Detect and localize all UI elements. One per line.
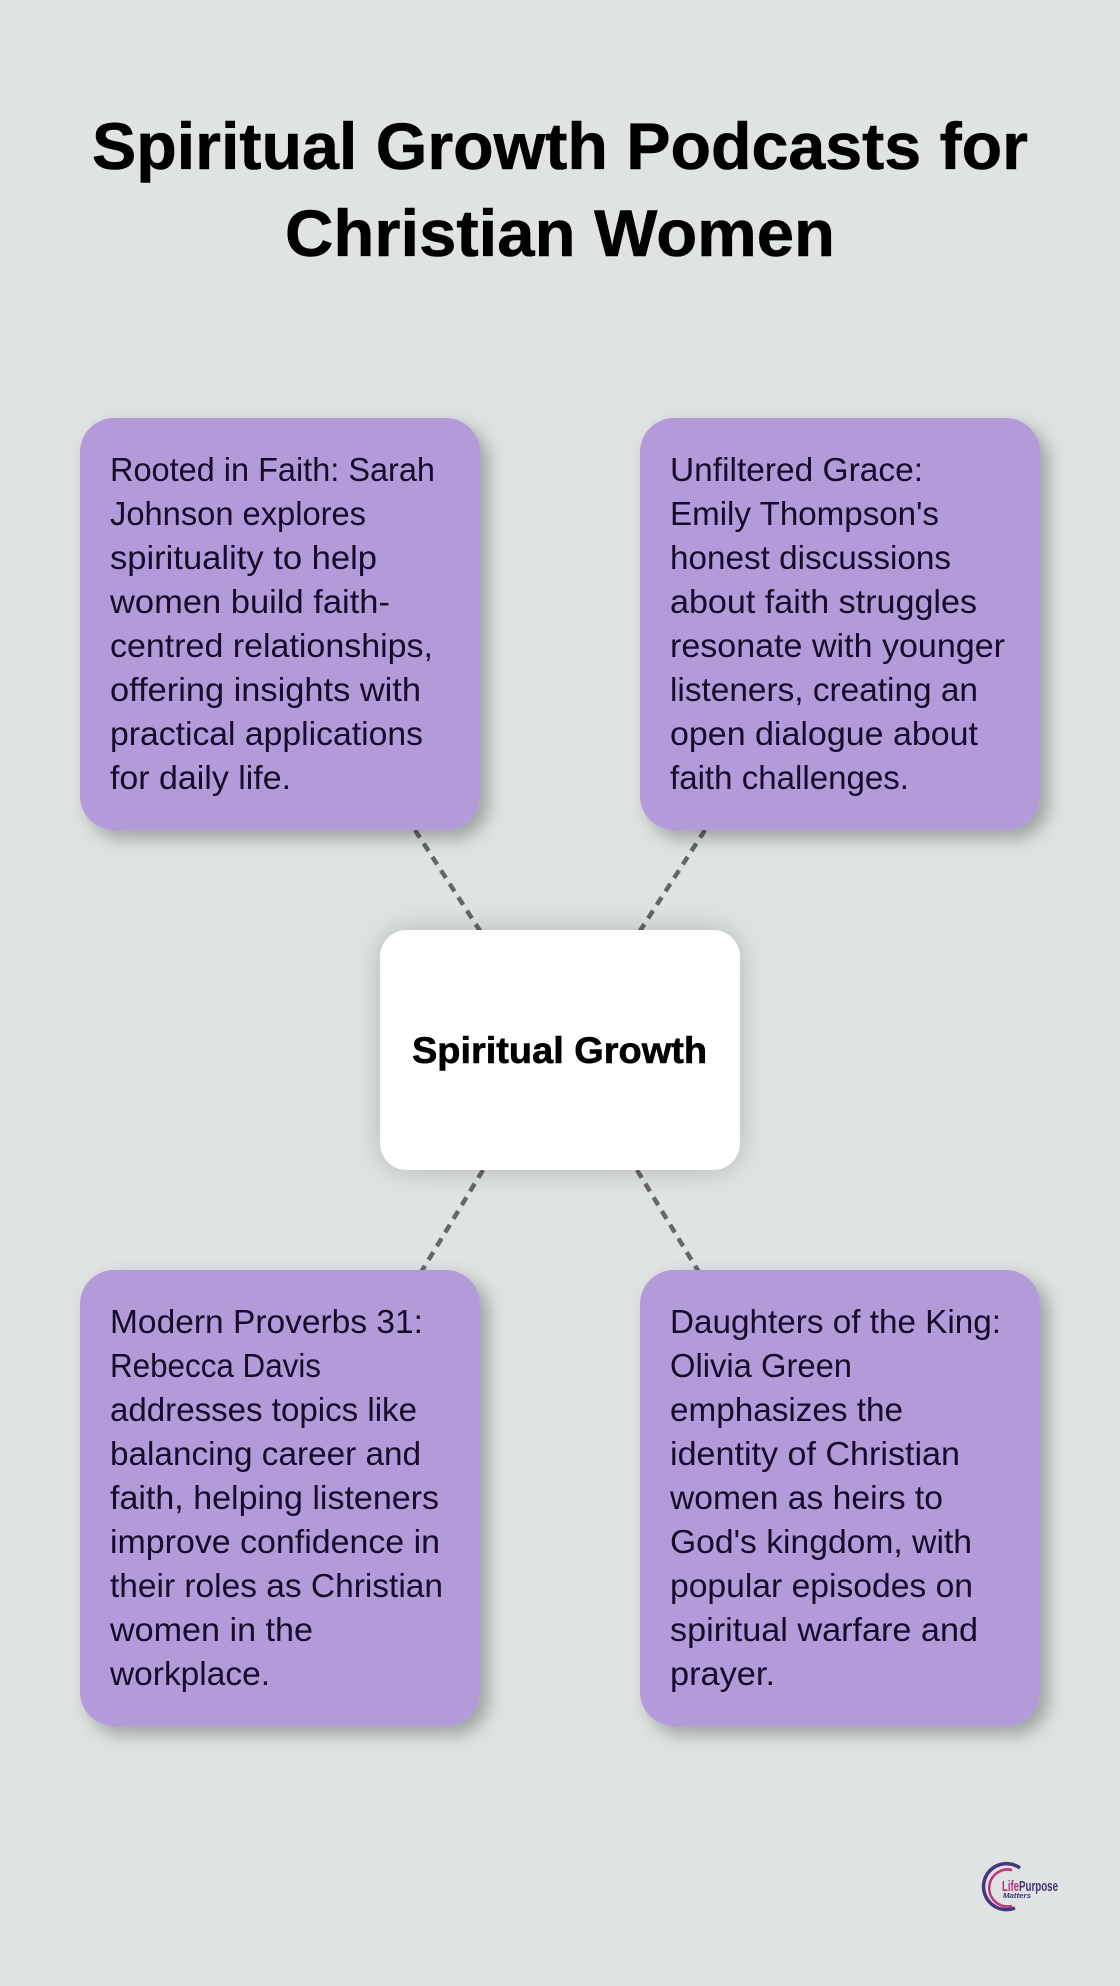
panel: central node (380, 930, 740, 1170)
logo: Life Purpose Matters: Purpose (1019, 1878, 1058, 1895)
panel: Daughters of the King: Daughters of the King: (670, 1303, 1001, 1340)
logo: Life Purpose Matters: Matters (1003, 1893, 1031, 1900)
panel: Unfiltered Grace: about faith struggles (670, 583, 977, 620)
panel: Unfiltered Grace: Unfiltered Grace: (670, 451, 923, 488)
panel: Rooted in Faith (80, 418, 480, 830)
panel: Rooted in Faith: centred relationships, (110, 627, 433, 664)
panel: Modern Proverbs 31: improve confidence in (110, 1523, 440, 1560)
panel: Unfiltered Grace: faith challenges. (670, 759, 909, 796)
title: Christian Women (285, 196, 835, 270)
panel: Unfiltered Grace (640, 418, 1040, 830)
panel: Modern Proverbs 31 (80, 1270, 480, 1726)
panel: Daughters of the King: Olivia Green (670, 1347, 852, 1384)
panel: Modern Proverbs 31: addresses topics like (110, 1391, 417, 1428)
panel: Unfiltered Grace: open dialogue about (670, 715, 978, 752)
panel: Daughters of the King: women as heirs to (669, 1479, 943, 1516)
panel: Rooted in Faith: women build faith- (109, 583, 390, 620)
panel: Modern Proverbs 31: workplace. (109, 1655, 270, 1692)
panel: Rooted in Faith: offering insights with (110, 671, 421, 708)
panel: Modern Proverbs 31: balancing career and (110, 1435, 421, 1472)
panel: Unfiltered Grace: resonate with younger (670, 627, 1005, 664)
title (92, 109, 1028, 270)
panel: Unfiltered Grace: honest discussions (670, 539, 951, 576)
panel: Rooted in Faith: Johnson explores (110, 495, 366, 532)
panel: central node: Spiritual Growth (412, 1030, 707, 1071)
panel: Modern Proverbs 31: faith, helping listeners (110, 1479, 439, 1516)
logo: Life Purpose Matters: Life (1002, 1878, 1019, 1895)
logo: Life Purpose Matters (984, 1864, 1058, 1910)
panel: Modern Proverbs 31: Rebecca Davis (110, 1347, 321, 1384)
panel: Daughters of the King (640, 1270, 1040, 1726)
panel: Daughters of the King: prayer. (670, 1655, 775, 1692)
panel: Unfiltered Grace: listeners, creating an (670, 671, 978, 708)
panel: Daughters of the King: spiritual warfare and (670, 1611, 978, 1648)
panel: Rooted in Faith: spirituality to help (110, 539, 377, 576)
panel: Rooted in Faith: practical applications (110, 715, 423, 752)
panel: Rooted in Faith: for daily life. (110, 759, 291, 796)
panel: Daughters of the King: identity of Christian (670, 1435, 960, 1472)
panel: Modern Proverbs 31: women in the (109, 1611, 313, 1648)
panel: Daughters of the King: popular episodes on (670, 1567, 973, 1604)
panel: Daughters of the King: God's kingdom, with (670, 1523, 972, 1560)
dashed connectors (415, 830, 705, 1274)
title: Spiritual Growth Podcasts for (92, 109, 1028, 183)
panel: Daughters of the King: emphasizes the (670, 1391, 903, 1428)
panel: Unfiltered Grace: Emily Thompson's (670, 495, 939, 532)
panel: Rooted in Faith: Rooted in Faith: Sarah (110, 451, 435, 488)
panel: Modern Proverbs 31: their roles as Christian (110, 1567, 443, 1604)
panel: Modern Proverbs 31: Modern Proverbs 31: (110, 1303, 423, 1340)
